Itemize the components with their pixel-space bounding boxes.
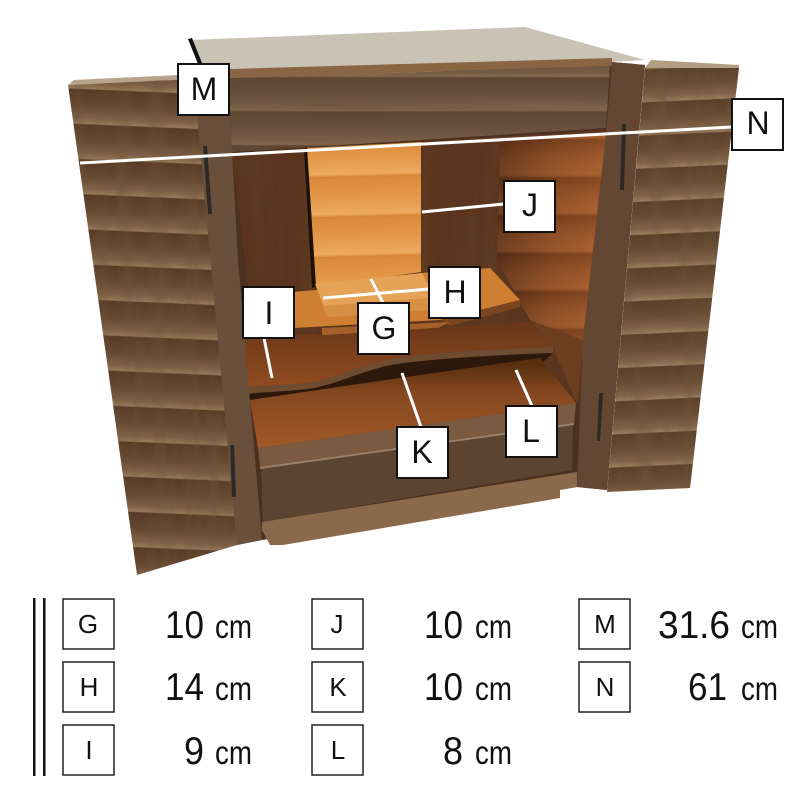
right door [606,60,740,494]
legend row M: 31.6 [658,604,730,647]
legend row G: cm [215,608,252,645]
callout G: G [372,310,396,346]
right frame [577,62,645,490]
legend row L: L [331,735,345,765]
callout I: I [265,295,273,331]
callout J: J [522,187,538,223]
callout H [429,267,480,318]
left door [68,74,238,576]
legend row J: J [330,609,344,639]
legend row G: 10 [165,604,204,647]
legend row I: cm [215,734,252,771]
legend row N: cm [741,670,778,707]
under-shelf shadow [247,353,553,402]
legend row N: 61 [688,666,727,709]
under-step block [322,322,450,336]
legend row H: H [80,672,98,702]
callout N: N [746,105,770,141]
callout G [358,303,409,354]
right side wall [497,135,606,403]
legend row M [579,599,778,649]
shelf front lip [247,347,553,394]
dimension lines [80,127,732,427]
callout J [504,181,555,232]
legend row J: 10 [424,604,463,647]
legend row I: 9 [184,730,204,773]
legend row N: N [596,672,614,702]
legend row G: G [78,609,98,639]
lower step H [243,268,520,330]
lit centre panel J [307,142,421,287]
legend row L: 8 [443,730,463,773]
legend row I [63,725,252,775]
legend row K [312,662,512,712]
drawer top edge [258,403,576,467]
cabinet body backing [193,62,645,545]
callout L [506,406,557,457]
callout M [178,64,229,115]
legend row H [63,662,252,712]
legend table [33,598,778,776]
cabinet interior [232,130,606,545]
callout M: M [191,71,217,107]
callout I [243,287,294,338]
cabinet top [188,27,645,80]
legend row M: cm [741,608,778,645]
callout N [732,99,783,150]
left frame [188,78,262,546]
shelf I [245,322,553,387]
callout H: H [443,274,467,310]
legend row L [312,725,512,775]
door hinges [203,124,626,497]
legend row K: 10 [424,666,463,709]
legend row G [63,599,252,649]
legend row J: cm [475,608,512,645]
legend row H: 14 [165,666,204,709]
header panel [228,66,610,152]
cabinet photograph [68,27,740,576]
callout L: L [522,413,540,449]
drawer top K L [250,358,576,448]
back wall [232,130,606,400]
drawer front [261,423,573,522]
legend row I: I [85,735,93,765]
cabinet base [262,472,577,545]
legend row N [579,662,778,712]
legend row M: M [594,609,616,639]
callout K [397,427,448,478]
double rule [33,598,46,776]
callout K: K [411,434,433,470]
legend row L: cm [475,734,512,771]
legend row K: K [329,672,347,702]
legend row H: cm [215,670,252,707]
legend row J [312,599,512,649]
legend row K: cm [475,670,512,707]
upper step G [315,273,430,317]
